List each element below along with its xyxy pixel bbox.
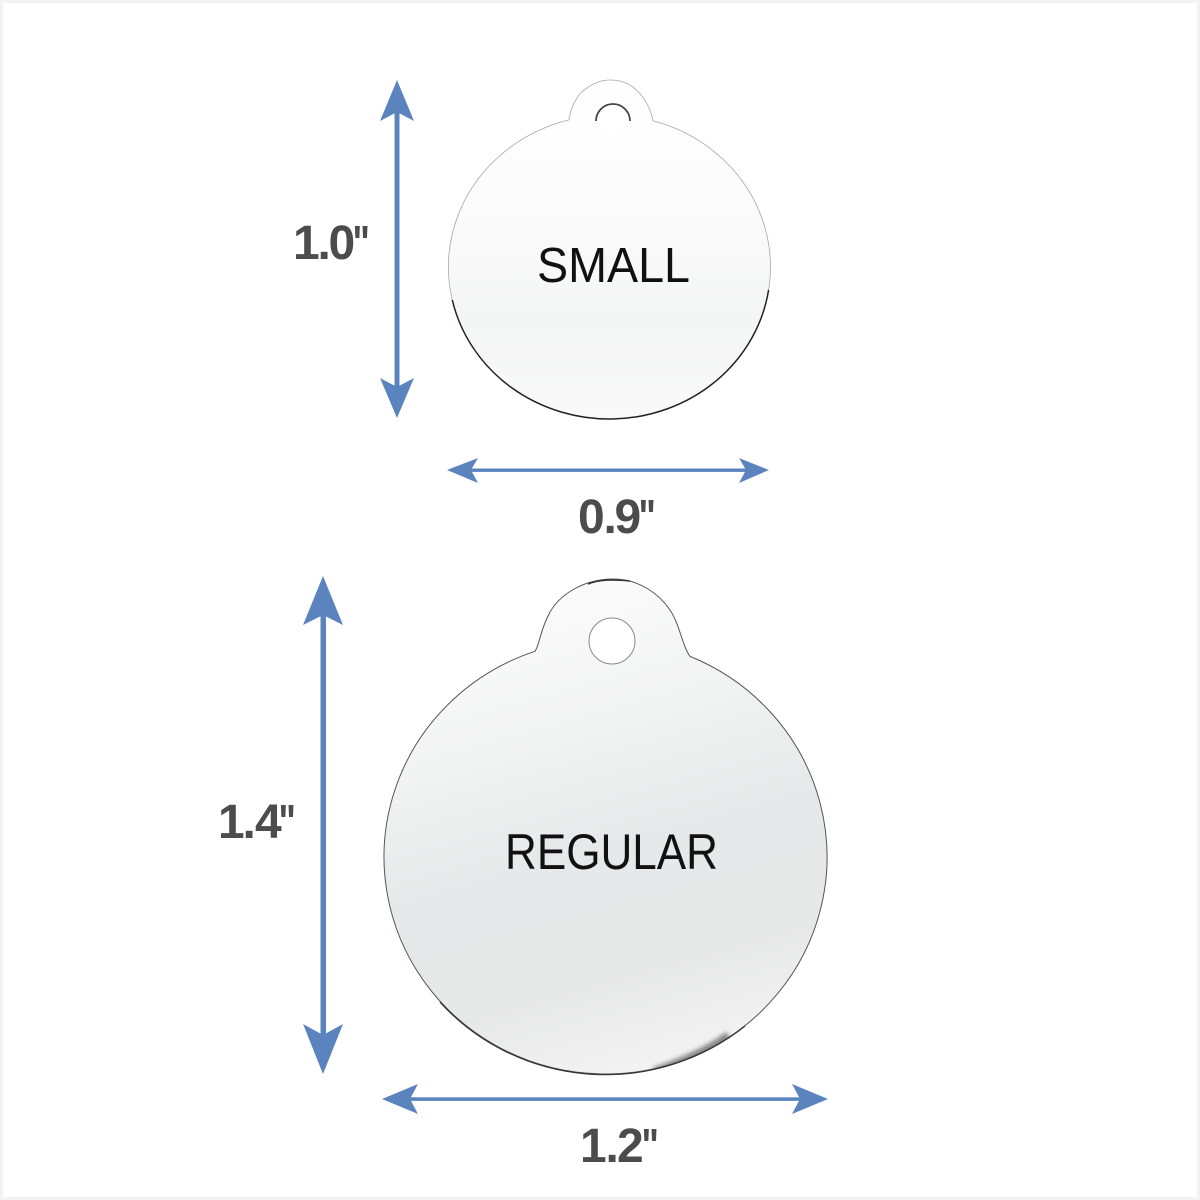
label: regular tag height: 1.4: [218, 796, 282, 849]
small tag hole: [596, 102, 630, 136]
small tag label: SMALL: [537, 239, 690, 293]
regular tag dark lower edge: [440, 1002, 745, 1075]
arrow: regular tag width: [382, 1084, 828, 1114]
regular tag label: REGULAR: [505, 824, 718, 880]
panel: regular tag: [384, 579, 827, 1075]
label: small tag width: ": [638, 491, 656, 544]
label: regular tag width: ": [642, 1120, 659, 1173]
label: small tag height: ": [352, 217, 370, 270]
label: regular tag height: ": [278, 796, 296, 849]
label: small tag height: 1.0: [293, 217, 355, 270]
arrow: small tag height: [380, 80, 414, 418]
regular tag body: [384, 579, 827, 1074]
label: small tag width: 0.9: [578, 491, 641, 544]
regular tag hole: [589, 618, 635, 664]
panel: small tag: [448, 80, 770, 419]
arrow: regular tag height: [303, 576, 343, 1074]
small tag dark lower edge: [452, 290, 769, 419]
arrow: small tag width: [447, 458, 769, 483]
regular tag scuff mark: [652, 1032, 732, 1074]
label: regular tag width: 1.2: [580, 1120, 644, 1173]
regular tag top edge: [588, 580, 630, 584]
small tag body: [448, 80, 770, 419]
